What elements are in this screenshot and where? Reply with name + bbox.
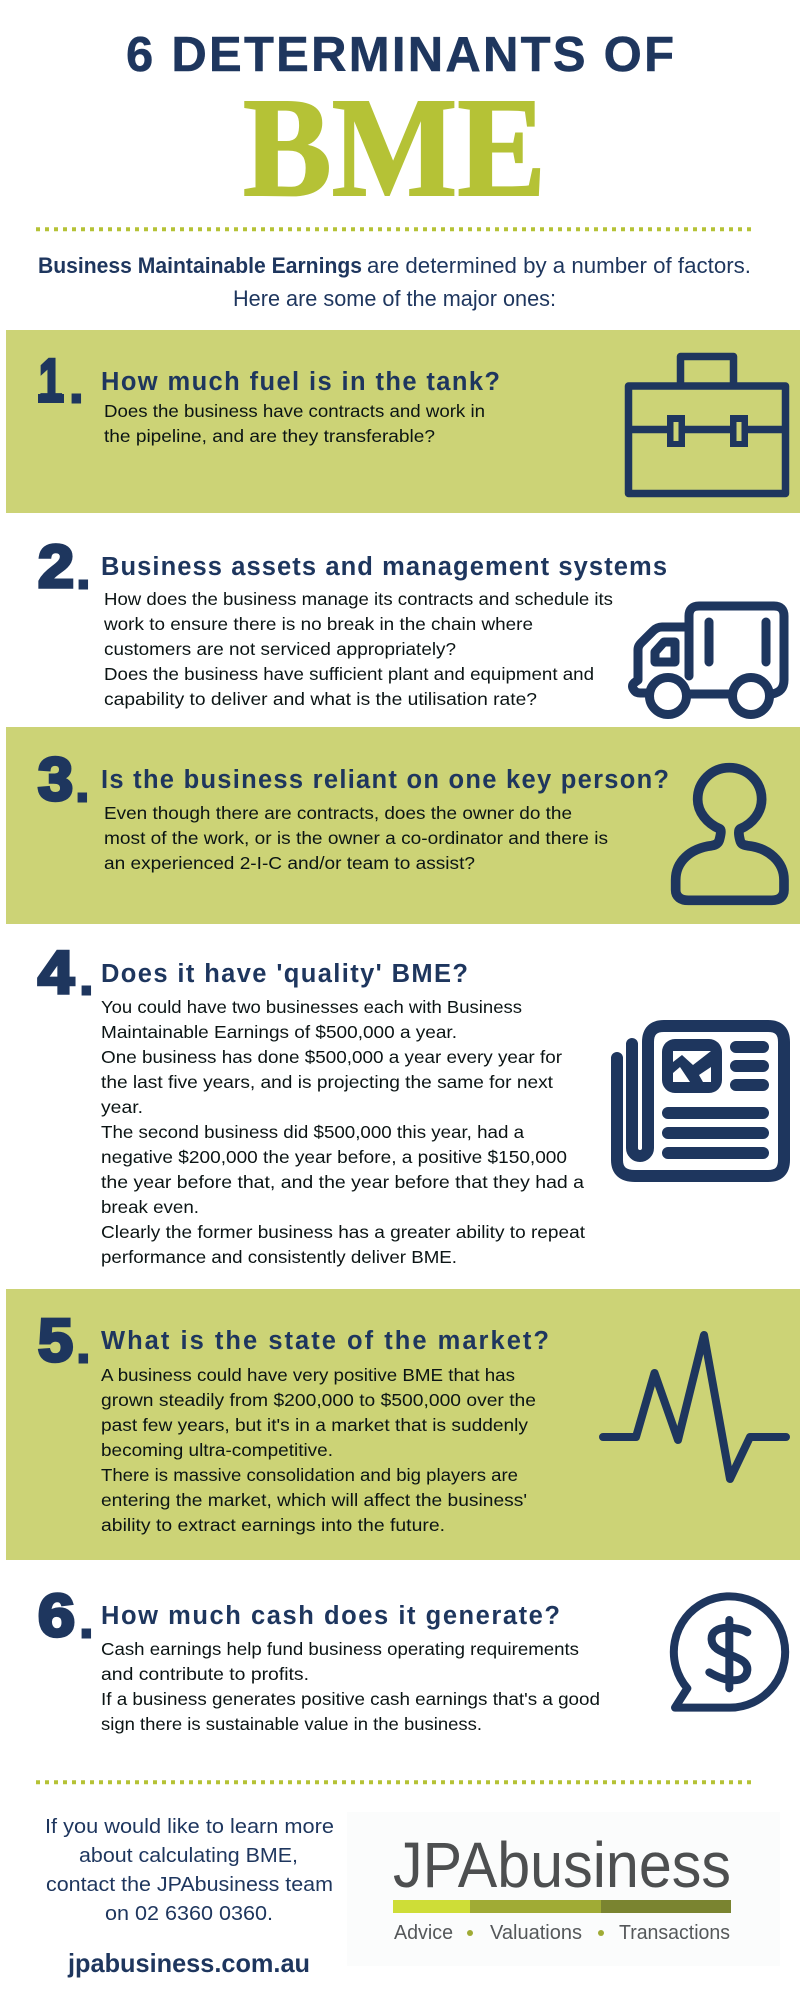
body text 5: becoming ultra-competitive. xyxy=(101,1440,333,1460)
body text 5: There is massive consolidation and big players are xyxy=(101,1465,518,1485)
icon: briefcase xyxy=(628,356,786,494)
title: 6 DETERMINANTS OF xyxy=(126,28,674,82)
body text 4 xyxy=(101,997,585,1267)
body text 5: past few years, but it's in a market that is suddenly xyxy=(101,1415,528,1435)
contact text: If you would like to learn more xyxy=(45,1816,334,1838)
body text 4: You could have two businesses each with Business xyxy=(101,997,522,1017)
body text 2: capability to deliver and what is the utilisation rate? xyxy=(104,689,537,709)
number 1 xyxy=(38,347,85,416)
panel: determinant 2 xyxy=(38,533,784,714)
body text 6: If a business generates positive cash earnings that's a good xyxy=(101,1689,600,1709)
body text 4: One business has done $500,000 a year every year for xyxy=(101,1047,562,1067)
body text 4: the year before that, and the year before that they had a xyxy=(101,1172,584,1192)
intro text: Business Maintainable Earnings xyxy=(38,253,362,278)
body text 3: Even though there are contracts, does the owner do the xyxy=(104,803,572,823)
heading 5: What is the state of the market? xyxy=(101,1327,549,1355)
panel: determinant 5 xyxy=(6,1289,800,1560)
number 2: . xyxy=(75,535,92,602)
panel: determinant 1 xyxy=(6,330,800,513)
body text 2: work to ensure there is no break in the chain where xyxy=(103,614,533,634)
body text 6 xyxy=(101,1639,600,1734)
contact text: on 02 6360 0360. xyxy=(105,1903,273,1925)
number 6: 6 xyxy=(38,1582,75,1649)
panel: determinant 3 xyxy=(6,727,800,924)
logo: JPAbusiness: Valuations xyxy=(490,1922,582,1944)
heading 2: Business assets and management systems xyxy=(101,553,667,581)
contact text xyxy=(45,1816,334,1925)
title: BME xyxy=(243,68,546,226)
website: jpabusiness.com.au xyxy=(67,1948,310,1978)
number 4: . xyxy=(78,941,95,1008)
number 4 xyxy=(38,939,95,1008)
body text 2 xyxy=(103,589,613,709)
panel: determinant 6 xyxy=(38,1582,785,1734)
body text 6: Cash earnings help fund business operating requirements xyxy=(101,1639,579,1659)
number 2 xyxy=(38,533,92,602)
body text 5: A business could have very positive BME that has xyxy=(101,1365,515,1385)
contact text: about calculating BME, xyxy=(79,1845,298,1867)
number 5: 5 xyxy=(38,1307,73,1374)
body text 5 xyxy=(101,1365,536,1535)
title xyxy=(126,28,674,226)
logo: JPAbusiness: Advice xyxy=(394,1922,453,1944)
body text 4: break even. xyxy=(101,1197,199,1217)
body text 4: Clearly the former business has a greater ability to repeat xyxy=(101,1222,585,1242)
logo: JPAbusiness: Transactions xyxy=(619,1922,730,1944)
heading 3: Is the business reliant on one key person? xyxy=(101,766,669,794)
heading 4: Does it have 'quality' BME? xyxy=(101,960,468,988)
number 5: . xyxy=(75,1309,92,1376)
icon: newspaper xyxy=(617,1026,784,1176)
intro text xyxy=(38,253,751,311)
intro text: Here are some of the major ones: xyxy=(233,286,556,311)
number 3 xyxy=(38,746,91,815)
body text 6: and contribute to profits. xyxy=(101,1664,309,1684)
number 1: . xyxy=(68,349,85,416)
heading 6: How much cash does it generate? xyxy=(101,1602,560,1630)
body text 2: customers are not serviced appropriately? xyxy=(104,639,456,659)
body text 1: the pipeline, and are they transferable? xyxy=(104,426,435,446)
icon: dollar speech bubble xyxy=(674,1596,785,1708)
icon: person xyxy=(676,768,784,900)
logo: JPAbusiness: JPAbusiness xyxy=(393,1829,731,1901)
number 2: 2 xyxy=(38,533,74,600)
body text 1 xyxy=(104,401,485,446)
body text 2: How does the business manage its contracts and schedule its xyxy=(104,589,613,609)
body text 1: Does the business have contracts and work in xyxy=(104,401,485,421)
body text 4: the last five years, and is projecting the same for next xyxy=(101,1072,553,1092)
body text 4: negative $200,000 the year before, a positive $150,000 xyxy=(101,1147,567,1167)
number 1: 1 xyxy=(39,347,62,414)
body text 4: The second business did $500,000 this year, had a xyxy=(101,1122,524,1142)
body text 5: grown steadily from $200,000 to $500,000 over the xyxy=(101,1390,536,1410)
body text 2: Does the business have sufficient plant and equipment and xyxy=(104,664,594,684)
number 5 xyxy=(38,1307,92,1376)
body text 6: sign there is sustainable value in the business. xyxy=(101,1714,482,1734)
body text 4: performance and consistently deliver BME. xyxy=(101,1247,457,1267)
number 6 xyxy=(38,1582,95,1651)
icon: truck xyxy=(632,606,784,714)
body text 4: Maintainable Earnings of $500,000 a year. xyxy=(101,1022,457,1042)
body text 3: most of the work, or is the owner a co-ordinator and there is xyxy=(104,828,608,848)
logo: JPAbusiness xyxy=(347,1812,780,1966)
body text 5: entering the market, which will affect the business' xyxy=(101,1490,527,1510)
panel: determinant 4 xyxy=(38,939,784,1267)
number 3: 3 xyxy=(38,746,73,813)
contact text: contact the JPAbusiness team xyxy=(46,1874,333,1896)
icon: pulse line xyxy=(603,1335,786,1479)
body text 3: an experienced 2-I-C and/or team to assist? xyxy=(104,853,475,873)
body text 5: ability to extract earnings into the future. xyxy=(101,1515,445,1535)
number 3: . xyxy=(74,748,91,815)
body text 4: year. xyxy=(101,1097,143,1117)
body text 3 xyxy=(104,803,608,873)
number 4: 4 xyxy=(38,939,75,1006)
heading 1: How much fuel is in the tank? xyxy=(101,368,500,396)
intro text: are determined by a number of factors. xyxy=(367,253,751,278)
number 6: . xyxy=(78,1584,95,1651)
